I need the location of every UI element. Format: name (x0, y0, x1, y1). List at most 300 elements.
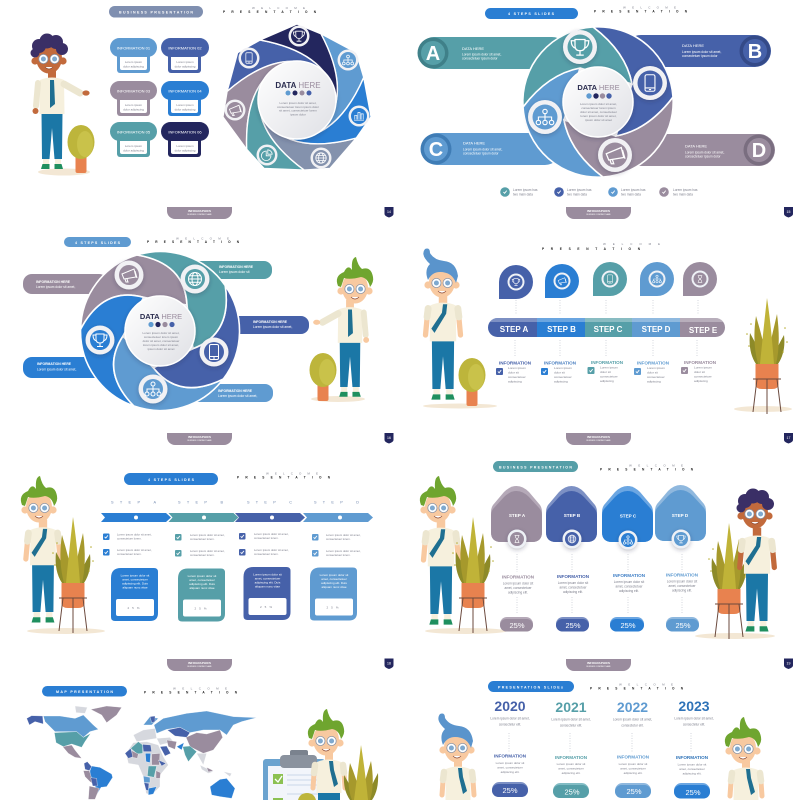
checklist item 4: two main data (673, 192, 693, 196)
card 3: adipiscing elit. Duis (255, 580, 281, 584)
bar: network info (180, 384, 273, 402)
card 2: aliquam nunc vitae (189, 586, 215, 590)
info B: INFORMATION (557, 574, 590, 579)
info card 04 (161, 81, 209, 116)
footer tab: INFOGRAPHICS (587, 661, 610, 665)
step C label: STEP C (247, 500, 292, 504)
card 1: Lorem ipsum dolor sit (121, 574, 150, 578)
checklist column 4 (312, 533, 361, 557)
text block: data here: DATA HERE (275, 81, 321, 90)
card 1: adipiscing elit. Duis (122, 582, 148, 586)
step card A (491, 486, 542, 548)
info A: INFORMATION (502, 574, 535, 580)
bar: phone info: INFORMATION HERE (253, 320, 288, 324)
checklist item 2: two main data (567, 192, 587, 196)
column 2020: adipiscing elit. (501, 770, 520, 774)
column 2023: INFORMATION (676, 755, 709, 760)
card 3 (244, 567, 290, 620)
percent pill C (610, 617, 644, 632)
text block: data here: DATA HERE (140, 312, 182, 321)
percent pill A (500, 617, 533, 632)
checklist column 1: consectetuer lorem. (117, 536, 142, 540)
icon: pie (256, 144, 278, 166)
info card 06: dolor adipiscing (175, 148, 196, 152)
info D (666, 572, 699, 592)
checklist item 3: Lorem ipsum has (621, 188, 646, 192)
card 3: Lorem ipsum dolor sit (253, 572, 282, 576)
column 2023: consectetur elit. (683, 722, 705, 726)
info B: amet, consectetuer (559, 586, 587, 590)
step card C (602, 486, 653, 550)
checklist column 3 (239, 532, 289, 556)
checklist item 2 (554, 187, 592, 197)
panel: slide 19 (420, 461, 793, 671)
column 2022: adipiscing elit. (624, 771, 643, 775)
bar B (625, 35, 771, 67)
bar C: C (429, 139, 443, 161)
info column A (496, 360, 532, 384)
heading: welcome presentation (144, 686, 238, 694)
card 3: 25% (260, 605, 275, 609)
column 2020: Lorem ipsum dolor sit amet, (490, 716, 530, 720)
info column A: Lorem ipsum (508, 366, 526, 370)
heading: welcome presentation (590, 682, 684, 690)
character with green hair (21, 476, 105, 634)
checklist column 1: Lorem ipsum dolor sit amet, (117, 532, 152, 536)
bar: trophy info: Lorem ipsum dolor sit amet, (37, 368, 76, 372)
step card C: STEP C (620, 514, 637, 518)
column 2020: Lorem ipsum dolor sit (496, 761, 524, 765)
info column B: dolor sit (554, 370, 565, 374)
icon: megaphone (598, 138, 632, 172)
info column B: INFORMATION (544, 360, 577, 366)
page badge (784, 207, 793, 218)
info card 06 (161, 122, 209, 157)
card 2: adipiscing elit. Duis (189, 582, 215, 586)
card 2: Lorem ipsum dolor sit (188, 574, 216, 578)
heading: welcome presentation: PRESENTATION (594, 10, 688, 14)
icon: cactus (310, 353, 336, 401)
checklist item 2: Lorem ipsum has (567, 188, 592, 192)
info column D: consectetuer (647, 375, 665, 379)
icon: globe (310, 148, 332, 168)
column 2022: 2022 (617, 699, 648, 715)
world map (27, 706, 257, 799)
step card A: STEP A (509, 513, 526, 518)
bar B: consectetuer ipsum dolor (682, 54, 719, 58)
card 1: 25% (127, 606, 143, 610)
character: presenter with dark hair (30, 34, 90, 176)
info card 02: INFORMATION 02 (168, 46, 202, 50)
heading: welcome presentation: PRESENTATION (590, 686, 684, 690)
info column E: adipiscing (694, 379, 708, 383)
text block: data here: dolor sit amet, consectetuer (580, 110, 617, 114)
bar A: DATA HERE (462, 46, 484, 51)
checklist column 3: consectetuer lorem. (254, 536, 279, 540)
column 2023: Lorem ipsum dolor sit (678, 762, 706, 766)
footer tab: BUSINESS COMPANY NAME (586, 665, 611, 668)
plant (344, 745, 378, 800)
heading: welcome presentation: WELCOME (266, 472, 318, 476)
bar: megaphone info: INFORMATION HERE (36, 280, 71, 284)
character with blue hair (438, 714, 475, 800)
heading pill (64, 237, 131, 247)
heading: welcome presentation: WELCOME (603, 242, 660, 246)
info column B (541, 360, 577, 384)
info column A: consectetuer (508, 375, 526, 379)
bar D: consectetuer ipsum dolor (685, 154, 722, 158)
page badge: 19 (787, 662, 790, 666)
heading pill: PRESENTATION SLIDEs (498, 685, 563, 689)
info card 03: dolor adipiscing (123, 108, 144, 112)
info column C: Lorem ipsum (600, 366, 618, 370)
card 4: amet, consectetuer (321, 577, 347, 581)
info column C: dolor sit (600, 370, 611, 374)
column 2023: adipiscing elit. (683, 772, 702, 776)
step card B (546, 486, 597, 548)
heading: welcome presentation: PRESENTATION (600, 468, 694, 472)
icon: phone (633, 66, 667, 100)
info card 05: dolor adipiscing (123, 148, 144, 152)
chart: five blade wheel (60, 243, 256, 434)
pin E (683, 262, 717, 296)
card 4: adipiscing elit. Duis (321, 581, 347, 585)
heading pill (493, 461, 578, 472)
heading: welcome presentation (542, 242, 660, 251)
page badge: 14 (387, 210, 391, 214)
card 4 (310, 568, 357, 620)
heading pill (488, 681, 574, 692)
info card 05: Lorem ipsum (125, 144, 143, 148)
bar: phone info (225, 316, 309, 334)
text block: data here (275, 81, 321, 116)
panel: slide 14 (30, 6, 394, 219)
card 2: amet, consectetuer (189, 578, 215, 582)
arrow 4 (303, 513, 373, 522)
page badge: 16 (387, 436, 391, 440)
info card 01: dolor adipiscing (123, 64, 144, 68)
arrow 3 (235, 513, 305, 522)
bar C: consectetuer ipsum dolor (463, 152, 500, 156)
column 2020: INFORMATION (494, 754, 527, 758)
info card 02: dolor adipiscing (175, 64, 196, 68)
card 1 (111, 568, 158, 621)
column 2023: 25% (685, 788, 701, 797)
card 1: amet, consectetuer (122, 578, 148, 582)
icon: cactus (298, 793, 316, 800)
footer tab (566, 207, 631, 219)
footer tab (167, 207, 232, 219)
character with green hair (725, 717, 762, 800)
heading pill (42, 686, 127, 696)
info C: amet, consectetuer (615, 584, 643, 588)
bar A: A (426, 43, 440, 65)
checklist column 2: Lorem ipsum dolor sit amet, (190, 533, 225, 537)
heading: welcome presentation: PRESENTATION (542, 247, 641, 251)
panel: slide 17 (423, 242, 793, 445)
plant on stand (52, 517, 94, 633)
info B (557, 574, 590, 594)
card 1: aliquam nunc vitae (122, 586, 148, 590)
bar C: Lorem ipsum dolor sit amet, (463, 148, 502, 152)
pin A (499, 265, 533, 299)
character with dark hair (736, 488, 774, 632)
text block: data here: consectetuer lorem ipsum (144, 335, 179, 339)
icon: trophy (288, 26, 310, 46)
footer tab (167, 659, 232, 671)
icon: network (138, 374, 168, 404)
step card B: STEP B (564, 513, 581, 518)
character: thinker with blue hair (423, 248, 497, 408)
bar A: consectetuer ipsum dolor (462, 56, 499, 60)
card 2 (178, 568, 225, 622)
info A: amet, consectetuer (504, 586, 532, 590)
column 2021: amet, consectetuer (558, 766, 584, 770)
column 2022: Lorem ipsum dolor sit amet, (613, 718, 652, 722)
panel: map slide (27, 686, 378, 800)
card 3: amet, consectetuer (255, 576, 280, 580)
info card 06: Lorem ipsum (176, 144, 194, 148)
column 2022: Lorem ipsum dolor sit (619, 762, 648, 766)
footer tab: INFOGRAPHICS (188, 435, 211, 439)
heading: welcome presentation: WELCOME (176, 236, 229, 240)
column 2021: INFORMATION (555, 755, 588, 760)
checklist column 2: consectetuer lorem. (190, 537, 215, 541)
text block: data here: Lorem ipsum dolor sit amet, (279, 101, 317, 105)
info column D: Lorem ipsum (647, 366, 665, 370)
text block: data here: Lorem ipsum dolor sit amet, (142, 331, 180, 335)
info card 06: INFORMATION 06 (168, 130, 202, 134)
info column A: adipiscing (508, 380, 522, 384)
heading: welcome presentation: WELCOME (252, 6, 305, 10)
icon: megaphone (224, 100, 246, 120)
plant on stand right (695, 523, 775, 639)
step bar: STEP E (689, 326, 718, 335)
info column A: dolor sit (508, 370, 519, 374)
info B: adipiscing elit. (563, 590, 583, 594)
panel: slide 15 (418, 6, 793, 219)
info column E (681, 360, 717, 383)
column 2022: amet, consectetuer (620, 766, 646, 770)
heading: welcome presentation: WELCOME (629, 464, 683, 468)
heading: welcome presentation: WELCOME (173, 686, 227, 690)
icon: globe (180, 264, 210, 294)
checklist item 1: two main data (513, 192, 533, 196)
page badge (384, 207, 394, 218)
heading: welcome presentation: PRESENTATION (223, 10, 317, 14)
heading pill (109, 6, 203, 18)
bar: trophy info: INFORMATION HERE (37, 362, 72, 366)
arrow 2 (168, 513, 238, 522)
icon: network (528, 100, 562, 134)
page badge (784, 433, 793, 444)
page badge: 18 (387, 662, 391, 666)
info column C: adipiscing (600, 379, 614, 383)
info column B: adipiscing (554, 380, 568, 384)
checklist column 2: consectetuer lorem. (190, 553, 215, 557)
percent pill D: 25% (675, 621, 691, 630)
info column C: INFORMATION (591, 360, 624, 365)
info card 02: Lorem ipsum (176, 60, 194, 64)
column 2023 (674, 698, 714, 798)
icon: megaphone (114, 260, 144, 290)
panel: slide 18 (21, 472, 393, 671)
bar D: D (752, 140, 766, 162)
text block: data here: consectetuer lorem ipsum (581, 106, 616, 110)
icon: bar chart (348, 106, 370, 126)
footer tab (566, 659, 631, 671)
info card 04: dolor adipiscing (175, 108, 196, 112)
footer tab: BUSINESS COMPANY NAME (586, 439, 611, 442)
text block: data here: consectetuer lorem ipsum dolor (277, 105, 319, 109)
bar D: DATA HERE (685, 144, 707, 148)
checklist item 1 (500, 187, 538, 197)
checklist column 3: Lorem ipsum dolor sit amet, (254, 548, 289, 552)
step bar: STEP D (642, 325, 671, 334)
bar: globe info: INFORMATION HERE (219, 265, 254, 269)
page badge (384, 658, 394, 669)
page badge (784, 658, 793, 669)
column 2021: 2021 (555, 699, 587, 715)
info D: amet, consectetuer (668, 584, 696, 588)
bar: network info: INFORMATION HERE (218, 389, 253, 393)
info column A: INFORMATION (499, 360, 532, 366)
plant on stand (734, 298, 792, 414)
chart: seven blade wheel (214, 21, 382, 186)
heading: welcome presentation (147, 236, 240, 244)
bar: phone info: Lorem ipsum dolor sit amet, (253, 325, 292, 329)
text block: data here: ipsum dolor sit amet (585, 118, 612, 122)
heading: welcome presentation (594, 6, 688, 14)
info card 03 (110, 81, 157, 116)
heading: welcome presentation: PRESENTATION (237, 476, 331, 480)
info C (613, 573, 646, 593)
step card D (655, 485, 706, 548)
card 4: 25% (326, 606, 342, 610)
text block: data here (140, 312, 182, 351)
icon: cactus (458, 358, 486, 406)
info card 02 (161, 38, 209, 73)
footer tab: BUSINESS COMPANY NAME (586, 213, 611, 216)
info card 01: INFORMATION 01 (117, 46, 151, 50)
info card 05: INFORMATION 05 (117, 130, 151, 134)
checklist column 4: consectetuer lorem. (326, 553, 351, 557)
column 2023: amet, consectetuer (679, 767, 705, 771)
column 2021: adipiscing elit. (562, 771, 581, 775)
step bar: STEP B (547, 325, 576, 334)
column 2021 (551, 699, 591, 798)
info column B: consectetuer (554, 375, 572, 379)
text block: data here: lorem ipsum dolor sit amet, (580, 114, 617, 118)
checklist column 4: Lorem ipsum dolor sit amet, (326, 533, 361, 537)
column 2021: Lorem ipsum dolor sit amet, (551, 718, 591, 722)
bar: globe info (190, 261, 272, 279)
heading pill: 4 STEPS SLIDES (148, 478, 195, 482)
info column E: dolor sit (694, 370, 705, 374)
panel: timeline slide (438, 681, 762, 800)
bar A (418, 37, 568, 69)
text block: data here: lorem ipsum dolor sit amet, (143, 343, 179, 347)
plant on stand left (452, 517, 494, 633)
page badge: 17 (787, 436, 790, 440)
character with green hair (420, 476, 507, 634)
percent pill B: 25% (565, 621, 581, 630)
heading: welcome presentation (237, 472, 331, 480)
step bar (488, 318, 725, 337)
info card 01: Lorem ipsum (125, 60, 143, 64)
heading pill (485, 8, 578, 19)
column 2020: 2020 (494, 698, 526, 714)
checklist column 4: Lorem ipsum dolor sit amet, (326, 549, 361, 553)
step D label: STEP D (314, 500, 359, 504)
icon: phone (238, 48, 260, 68)
icon: trophy (86, 326, 114, 354)
info D: Lorem ipsum dolor sit (667, 580, 697, 584)
checklist item 1: Lorem ipsum has (513, 188, 538, 192)
footer tab: BUSINESS COMPANY NAME (187, 213, 212, 216)
info C: adipiscing elit. (619, 589, 639, 593)
icon: trophy (563, 30, 597, 64)
heading pill (124, 473, 218, 485)
info card 03: Lorem ipsum (125, 103, 143, 107)
text block: data here: Lorem ipsum dolor sit amet, (580, 102, 617, 106)
heading: welcome presentation: WELCOME (619, 682, 673, 686)
character with green hair (308, 709, 345, 800)
card 3: aliquam nunc vitae (255, 584, 280, 588)
bar B: DATA HERE (682, 43, 704, 48)
info card 03: INFORMATION 03 (117, 88, 151, 94)
info D: INFORMATION (666, 572, 699, 578)
heading: welcome presentation (600, 464, 694, 472)
info D: adipiscing elit. (672, 588, 692, 592)
step B label: STEP B (178, 500, 223, 504)
heading pill: 4 STEPS SLIDES (75, 241, 121, 245)
pin B (545, 264, 579, 298)
bar: megaphone info (23, 274, 108, 294)
icon: cactus (68, 125, 94, 173)
heading: welcome presentation: PRESENTATION (147, 240, 240, 244)
info column C: consectetuer (600, 374, 618, 378)
bar C: DATA HERE (463, 140, 485, 146)
column 2021: consectetur elit. (560, 724, 582, 728)
info column C (588, 360, 624, 383)
panel: slide 16 (23, 236, 394, 445)
footer tab (167, 433, 232, 445)
footer tab: INFOGRAPHICS (587, 209, 610, 213)
text block: data here: DATA HERE (577, 83, 620, 92)
info card 01 (110, 38, 157, 73)
checklist item 3: two main data (621, 192, 641, 196)
checklist item 4: Lorem ipsum has (673, 188, 698, 192)
column 2022 (613, 699, 652, 798)
footer tab: BUSINESS COMPANY NAME (187, 665, 212, 668)
info C: Lorem ipsum dolor sit (614, 580, 644, 584)
card 4: Lorem ipsum dolor sit (320, 573, 348, 577)
column 2021: 25% (564, 788, 580, 796)
checklist column 2: Lorem ipsum dolor sit amet, (190, 549, 225, 553)
column 2023: 2023 (678, 698, 710, 714)
text block: data here: dolor sit amet, consectetuer (143, 339, 179, 343)
bar A: Lorem ipsum dolor sit amet, (462, 52, 501, 56)
footer tab: BUSINESS COMPANY NAME (187, 439, 212, 442)
text block: data here: sit amet, consectetuer lorem (279, 108, 317, 112)
pin C (593, 262, 627, 296)
percent pill A: 25% (509, 621, 525, 630)
bar D (625, 134, 775, 166)
chart: four blade wheel (523, 27, 673, 177)
page badge: 15 (787, 210, 790, 214)
info column E: Lorem ipsum (694, 366, 712, 370)
